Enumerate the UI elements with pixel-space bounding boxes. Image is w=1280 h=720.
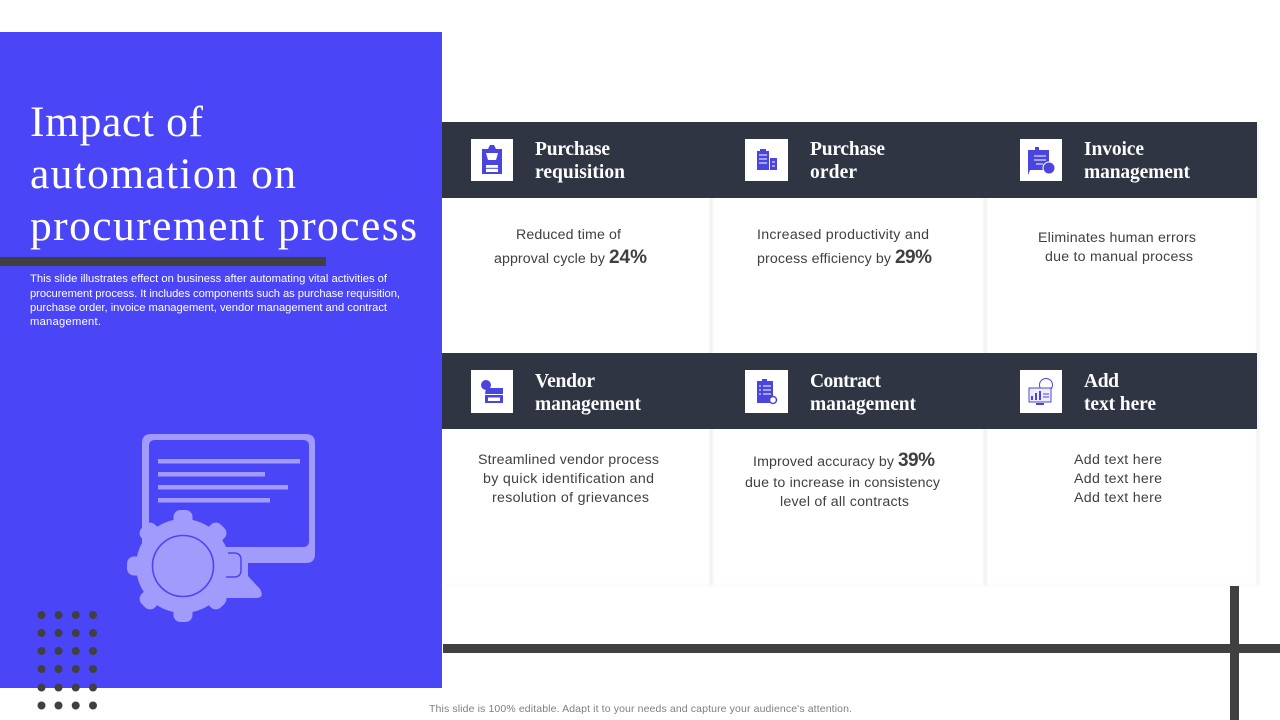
description	[30, 273, 400, 328]
body text	[1074, 452, 1162, 506]
panel: purchase order	[711, 122, 985, 268]
title	[30, 98, 417, 250]
title underline bar	[0, 257, 326, 266]
panel: vendor management	[442, 353, 711, 506]
body text	[757, 227, 932, 268]
body text: by quick identification and	[483, 471, 654, 487]
icon: monitor with gear	[127, 434, 315, 622]
icon: invoice	[1020, 139, 1062, 181]
heading: Add	[1084, 371, 1119, 392]
body text: 29%	[895, 247, 932, 268]
footer note: This slide is 100% editable. Adapt it to your needs and capture your audience's attention.	[429, 703, 852, 715]
panel: title sidebar	[0, 32, 442, 688]
icon: vendor store	[471, 370, 513, 413]
heading	[1084, 139, 1190, 183]
description: purchase order, invoice management, vendor management and contract	[30, 302, 388, 314]
body text: Improved accuracy by	[753, 454, 895, 470]
body text: Eliminates human errors	[1038, 230, 1196, 246]
heading: management	[535, 394, 642, 415]
vertical bar	[1230, 586, 1239, 720]
body text: due to manual process	[1045, 249, 1193, 265]
body text	[494, 227, 647, 268]
body text: approval cycle by	[494, 251, 606, 267]
body text: Add text here	[1074, 471, 1162, 487]
heading	[810, 371, 916, 415]
title: procurement process	[30, 202, 417, 250]
description: management.	[30, 316, 101, 328]
heading: Contract	[810, 371, 882, 392]
body text: Increased productivity and	[757, 227, 929, 243]
panel: invoice management	[985, 122, 1257, 265]
card shadows	[443, 125, 1259, 586]
icon: order clipboard	[745, 139, 788, 181]
heading: Invoice	[1084, 139, 1144, 160]
icon: clipboard with cart	[471, 139, 513, 181]
heading: Vendor	[535, 371, 595, 392]
body text: Add text here	[1074, 452, 1162, 468]
body text: 39%	[898, 450, 935, 471]
horizontal bar	[443, 644, 1280, 653]
body text: level of all contracts	[780, 494, 909, 510]
description: procurement process. It includes components such as purchase requisition,	[30, 288, 400, 300]
panel: contract management	[711, 353, 985, 510]
heading	[535, 139, 625, 183]
heading: text here	[1084, 394, 1156, 415]
body text: Streamlined vendor process	[478, 452, 659, 468]
panel: purchase requisition	[442, 122, 711, 268]
heading	[810, 139, 885, 183]
heading: Purchase	[810, 139, 885, 160]
heading	[535, 371, 642, 415]
body text: 24%	[609, 247, 647, 268]
heading	[1084, 371, 1156, 415]
body text: Reduced time of	[516, 227, 621, 243]
icon: dashboard and clock	[1020, 370, 1062, 413]
title: Impact of	[30, 98, 204, 146]
heading: management	[810, 394, 916, 415]
decorative dot grid	[38, 611, 97, 710]
panel: add text here	[985, 353, 1257, 506]
body text: resolution of grievances	[492, 490, 649, 506]
body text: process efficiency by	[757, 251, 892, 267]
heading: management	[1084, 162, 1190, 183]
title: automation on	[30, 150, 296, 198]
body text: Add text here	[1074, 490, 1162, 506]
description: This slide illustrates effect on business after automating vital activities of	[30, 273, 388, 285]
body text	[1038, 230, 1196, 265]
heading: order	[810, 162, 857, 183]
heading: requisition	[535, 162, 625, 183]
body text	[745, 450, 941, 510]
body text	[478, 452, 659, 506]
body text: due to increase in consistency	[745, 475, 941, 491]
icon: contract clipboard	[745, 370, 788, 413]
heading: Purchase	[535, 139, 610, 160]
